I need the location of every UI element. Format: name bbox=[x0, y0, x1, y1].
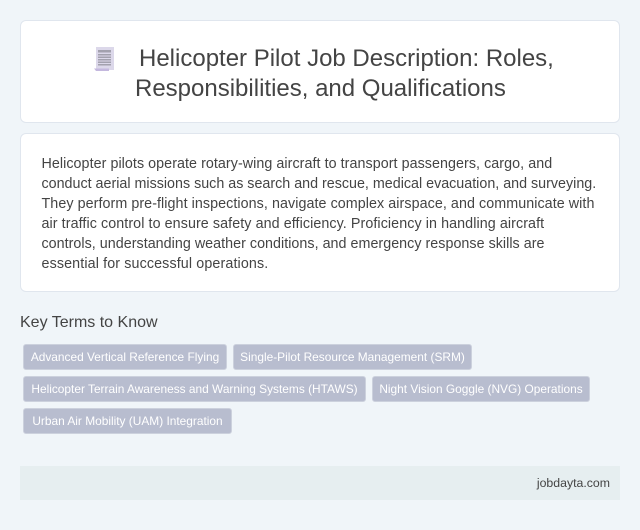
tag: Urban Air Mobility (UAM) Integration bbox=[32, 414, 223, 428]
description text: air traffic control to ensure safety and efficiency. Proficiency in handling aircraft bbox=[42, 216, 544, 232]
description text: essential for successful operations. bbox=[42, 256, 268, 272]
description text: controls, understanding weather conditions, and emergency response skills are bbox=[42, 236, 544, 252]
description text: conduct aerial missions such as search and rescue, medical evacuation, and surveying. bbox=[42, 176, 596, 192]
icon: document scroll bbox=[94, 47, 114, 71]
tag: Night Vision Goggle (NVG) Operations bbox=[379, 382, 583, 396]
section heading: Key Terms to Know bbox=[20, 314, 158, 331]
tag: Single-Pilot Resource Management (SRM) bbox=[240, 350, 465, 364]
tag: Helicopter Terrain Awareness and Warning Systems (HTAWS) bbox=[31, 382, 358, 396]
key terms tags bbox=[23, 344, 590, 434]
title: Helicopter Pilot Job Description: Roles, bbox=[139, 45, 554, 72]
tag: Advanced Vertical Reference Flying bbox=[31, 350, 219, 364]
tag bbox=[23, 344, 227, 370]
header panel bbox=[20, 20, 620, 123]
tag bbox=[23, 408, 232, 434]
tag bbox=[23, 376, 366, 402]
tag bbox=[372, 376, 590, 402]
description text bbox=[42, 156, 596, 272]
description panel bbox=[20, 133, 620, 292]
title bbox=[135, 45, 554, 102]
description text: They perform pre-flight inspections, navigate complex airspace, and communicate with bbox=[42, 196, 594, 212]
title: Responsibilities, and Qualifications bbox=[135, 75, 506, 102]
description text: Helicopter pilots operate rotary-wing aircraft to transport passengers, cargo, and bbox=[42, 156, 552, 172]
footer source: jobdayta.com bbox=[537, 476, 610, 490]
footer bar bbox=[20, 466, 620, 500]
tag bbox=[233, 344, 472, 370]
